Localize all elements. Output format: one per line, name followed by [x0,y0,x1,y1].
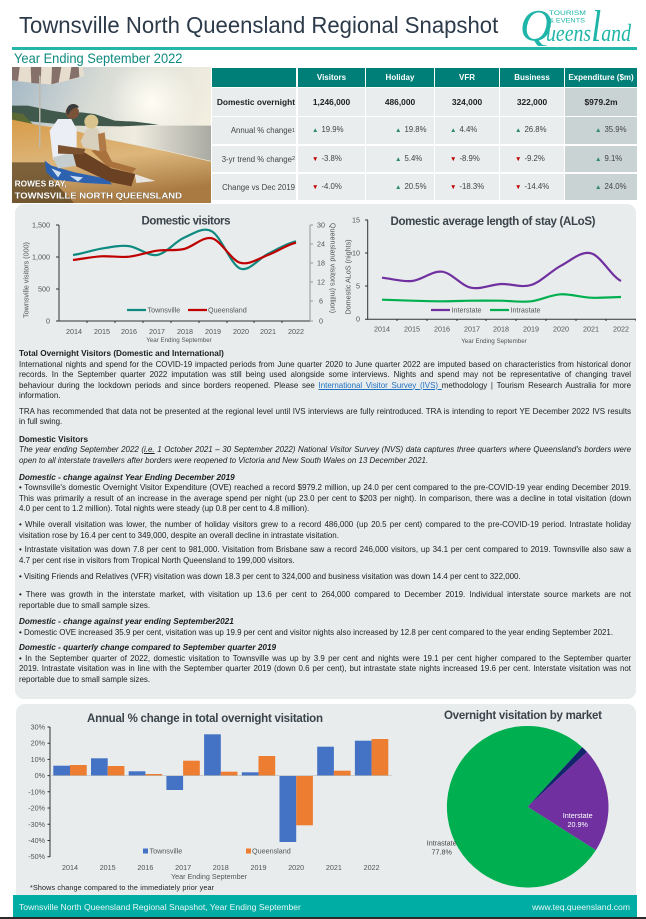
text block: total overnight visitors: information. [19,391,60,400]
line chart: domestic visitors: 0 [46,316,50,326]
line chart: domestic visitors: 2022 [288,327,304,336]
text block: TRA recommendation [19,407,631,426]
line chart: domestic visitors: 2018 [177,327,193,336]
line chart: domestic visitors: 2017 [149,327,165,336]
footer bar [13,895,637,917]
summary table: ▼ -8.9% [450,154,480,163]
logo: Tourism and Events Queensland: TOURISM [549,10,586,17]
photo caption: ROWES BAY, [15,178,67,188]
summary table: ▲ 24.0% [595,182,627,191]
summary table: ▼ -9.2% [515,154,545,163]
line chart: domestic average length of stay [344,216,636,345]
bar chart: annual % change in total overnight visitation: 2021 [326,863,342,872]
pie chart: overnight visitation by market: 77.8% [432,848,452,856]
bar chart: annual % change in total overnight visitation: 0% [35,771,46,780]
text block: quarterly change: reportable due to small sample sizes. [19,674,150,684]
line chart: domestic visitors: Townsville [148,306,180,314]
line chart: domestic average length of stay: Domestic average length of stay (ALoS) [390,216,596,228]
line chart: domestic visitors: 30 [317,220,325,230]
line chart: domestic visitors: 2020 [233,327,249,336]
summary table: 2 [292,156,295,162]
subtitle: Year Ending September 2022 [14,51,182,66]
text block: intrastate visitation: 4.7 per cent rise in visitors from Tropical North Queensland to 199,000 visitors. [19,556,295,564]
line chart: domestic visitors: 1,000 [32,252,50,262]
summary table: ▲ 19.9% [312,125,344,134]
line chart: domestic average length of stay: 2014 [374,324,390,334]
pie chart: overnight visitation by market: 20.9% [568,820,588,829]
summary table: VFR [459,73,475,82]
text block: change against year ending September 2021: Domestic - change against year ending September2021 [19,617,234,626]
footer website: www.teq.queensland.com [532,902,630,912]
bar chart: annual % change in total overnight visitation: 30% [31,722,46,732]
photo: Rowes Bay beach [12,67,211,203]
text block: intrastate visitation: • Intrastate visitation was down 7.8 per cent to 981,000. Visitation from Brisbane saw a record 246,000 visitors, up 34.1 per cent compared to 2019. Townsville also saw a [19,545,631,554]
text block: holiday visitors [19,520,631,540]
text block: intrastate visitation [19,545,632,564]
summary table: ▲ 9.1% [595,154,622,163]
summary table: ▼ -3.8% [312,154,342,163]
text block: interstate market: reportable due to small sample sizes. [19,600,150,610]
text block: domestic visitors [19,435,631,465]
bar chart: annual % change in total overnight visitation: -20% [28,804,46,812]
line chart: domestic visitors: Queensland [208,306,247,314]
line chart: domestic visitors: 2019 [205,327,221,336]
text block: TRA recommendation: TRA has recommended that data not be presented at the regional level until IVS interviews are fully reintroduced. TRA is intending to report YE December 2022 IVS results [19,407,631,416]
pie chart: overnight visitation by market: Overnight visitation by market [444,710,602,722]
summary table [212,68,637,200]
bar chart: annual % change in total overnight visitation: 2016 [137,863,153,872]
bar chart: annual % change in total overnight visitation: Queensland [252,846,291,856]
bar chart: annual % change in total overnight visitation: 2015 [100,863,116,872]
summary table: Holiday [386,73,414,82]
bar chart: annual % change in total overnight visitation: Year Ending September [171,872,248,881]
text block: VFR and business: • Visiting Friends and Relatives (VFR) visitation was down 18.3 per cent to 324,000 and business visitation was down 14.4 per cent to 322,000. [19,572,521,581]
text block: TRA recommendation: in full swing. [19,417,62,426]
photo caption: TOWNSVILLE NORTH QUEENSLAND [15,190,182,200]
summary table: ▲ 4.4% [450,125,477,134]
line chart: domestic visitors: 2014 [66,327,82,336]
panel: domestic charts and commentary [15,204,636,699]
text block: total overnight visitors: behaviour during the lockdown periods and since borders reopened. Please see International Visitor Survey (IVS) methodology | Tourism Research Australia for more [19,380,631,390]
line chart: domestic average length of stay: Year Ending September [461,338,527,345]
summary table: ▼ -4.0% [312,182,342,191]
line chart: domestic average length of stay: Intrastate [510,306,540,314]
bar chart: annual % change in total overnight visitation: 10% [31,755,46,764]
text block: total overnight visitors: International nights and spend for the COVID-19 impacted periods from June quarter 2020 to June quarter 2022 are imputed based on characteristics from historical donor [19,360,631,368]
line chart: domestic visitors: Townsville visitors (000) [22,242,30,318]
line chart: domestic average length of stay: 2020 [553,324,569,334]
text block: holiday visitors: • While overall visitation was lower, the number of holiday visitors grew to a record 486,000 (up 20.5 per cent) compared to the pre-COVID-19 period. Intrastate holiday [19,520,631,529]
text block: change against year ending December 2019: 4.0 per cent to 1.2 million). Total nights were steady (up 0.8 per cent to 4.8 million). [19,504,309,513]
line chart: domestic average length of stay: 2018 [493,324,509,334]
summary table: 322,000 [517,97,547,107]
line chart: domestic visitors: 2015 [94,327,110,336]
summary table: 3-yr trend % change [222,154,292,164]
header rule [12,47,637,50]
footer title: Townsville North Queensland Regional Snapshot, Year Ending September [19,902,301,912]
summary table: ▼ -18.3% [450,182,484,191]
text block: domestic visitors: The year ending September 2022 (i.e. 1 October 2021 – 30 September 2022) National Visitor Survey (NVS) data captures three quarters where Queensland's borders were [19,445,631,454]
text block: change against year ending December 2019: Domestic - change against Year Ending December 2019 [19,472,235,482]
text block: holiday visitors: visitation rose by 16.4 per cent to 349,000, despite an overall decline in intrastate visitation. [19,530,339,540]
line chart: domestic visitors: 0 [319,316,323,326]
text block: total overnight visitors [19,349,631,400]
bar chart: annual % change in total overnight visitation: -10% [28,787,46,796]
line chart: domestic visitors: Year Ending September [146,337,212,344]
bar chart: annual % change in total overnight visitation: 2022 [364,863,380,872]
summary table: 324,000 [452,97,482,107]
bar chart: annual % change in total overnight visitation: -40% [28,836,46,845]
line chart: domestic average length of stay: 2021 [583,324,599,334]
pie chart: overnight visitation by market [427,710,608,888]
title: Townsville North Queensland Regional Snapshot [19,12,498,38]
summary table: Business [514,73,550,82]
panel: visitation charts [16,704,636,896]
summary table: 1 [292,128,295,134]
line chart: domestic visitors: 24 [317,240,325,248]
line chart: domestic visitors: 18 [317,258,325,268]
summary table: Domestic overnight [217,97,295,107]
summary table: ▲ 20.5% [395,182,427,191]
line chart: domestic visitors: 6 [319,296,323,306]
line chart: domestic average length of stay: 2022 [613,324,629,334]
text block: change against year ending September 2021 [19,617,613,636]
bar chart: annual % change in total overnight visitation: Townsville [150,846,182,856]
line chart: domestic visitors [22,216,338,344]
summary table: Change vs Dec 2019 [222,182,295,192]
text block: interstate market [19,590,631,610]
line chart: domestic visitors: 12 [317,278,325,286]
summary table: Annual % change [231,126,292,135]
bar chart: annual % change in total overnight visitation: 2014 [62,863,78,872]
summary table: ▲ 19.8% [395,125,427,134]
text block: domestic visitors: Domestic Visitors [19,435,88,444]
bar chart: annual % change in total overnight visitation: 2018 [213,863,229,872]
line chart: domestic average length of stay: 10 [352,248,360,258]
line chart: domestic average length of stay: 2015 [404,324,420,334]
text block: change against year ending December 2019 [19,472,631,513]
logo: Tourism and Events Queensland: & EVENTS [549,18,585,25]
photo caption [15,178,182,200]
pie chart: overnight visitation by market: Interstate [563,811,593,820]
line chart: domestic visitors: Queensland visitors (million) [328,223,338,313]
line chart: domestic average length of stay: 2019 [523,324,539,334]
bar chart: annual % change in total overnight visitation [28,713,392,892]
text block: change against year ending September 2021: • Domestic OVE increased 35.9 per cent, visitation was up 19.9 per cent and visitor nights also increased by 12.8 per cent compared to the year ending September 2021. [19,628,613,636]
bar chart: annual % change in total overnight visitation: 2020 [288,863,304,872]
text block: total overnight visitors: records. In the September quarter 2022 imputation was still being used alongside some interviews. Nights and spend may not be representative of changing travel [19,370,631,379]
line chart: domestic average length of stay: 0 [356,314,360,324]
line chart: domestic visitors: 500 [38,284,50,294]
summary table: Expenditure ($m) [568,73,634,82]
summary table: ▲ 5.4% [395,154,422,163]
text block: quarterly change [19,643,631,684]
line chart: domestic average length of stay: 2017 [464,324,480,334]
bar chart: annual % change in total overnight visitation: 20% [31,739,46,748]
text block: quarterly change: • In the September quarter of 2022, domestic visitation to Townsville was up by 3.9 per cent and nights were 19.1 per cent higher compared to the September quarter [19,654,631,662]
summary table: ▼ -14.4% [515,182,549,191]
text block: total overnight visitors: Total Overnight Visitors (Domestic and International) [19,349,224,358]
line chart: domestic average length of stay: 5 [356,282,360,290]
bar chart: annual % change in total overnight visitation: 2017 [175,863,191,872]
pie chart: overnight visitation by market: Intrastate [427,838,457,848]
text block: change against year ending December 2019: This was primarily a result of an increase in the average spend per night (up 23.0 per cent to $203 per night). In comparison, there was a decline in total visitation (down [19,494,631,502]
text block: quarterly change: Domestic - quarterly change compared to September quarter 2019 [19,643,276,652]
text block: domestic visitors: open to all interstate travellers after borders were reopened to Victoria and New South Wales on 13 December 2021. [19,456,428,465]
summary table: Visitors [317,73,346,82]
text block: interstate market: • There was growth in the interstate market, with visitation up 13.6 per cent to 264,000 compared to December 2019. Individual interstate source markets are not [19,590,631,599]
summary table: ▲ 35.9% [595,125,627,134]
bar chart: annual % change in total overnight visitation: *Shows change compared to the immediately prior year [30,883,215,892]
bar chart: annual % change in total overnight visitation: 2019 [250,863,266,872]
summary table: $979.2m [584,97,618,107]
line chart: domestic average length of stay: Domestic ALoS (nights) [344,239,352,315]
line chart: domestic visitors: Domestic visitors [142,216,230,228]
bar chart: annual % change in total overnight visitation: -50% [28,852,46,861]
summary table: 486,000 [385,97,415,107]
summary table: ▲ 26.8% [515,125,547,134]
text block: quarterly change: 2019. Intrastate visitation was in line with the September quarter 2019 (down 0.6 per cent), but intrastate state nights increased 19.6 per cent. Interstate visitation was not [19,664,631,673]
line chart: domestic visitors: 2016 [121,327,137,336]
line chart: domestic average length of stay: 2016 [434,324,450,334]
bar chart: annual % change in total overnight visitation: -30% [28,820,46,829]
bar chart: annual % change in total overnight visitation: Annual % change in total overnight visitation [87,713,323,725]
line chart: domestic average length of stay: Interstate [452,306,481,314]
line chart: domestic average length of stay: 15 [352,216,360,224]
summary table: 1,246,000 [313,97,350,107]
bottom edge [0,917,646,919]
line chart: domestic visitors: 2021 [260,327,276,336]
line chart: domestic visitors: 1,500 [32,220,50,230]
text block: change against year ending December 2019: • Townsville's domestic Overnight Visitor Expenditure (OVE) reached a record $979.2 million, up 24.0 per cent compared to the pre-COVID-19 year ending December 2019. [19,483,631,492]
